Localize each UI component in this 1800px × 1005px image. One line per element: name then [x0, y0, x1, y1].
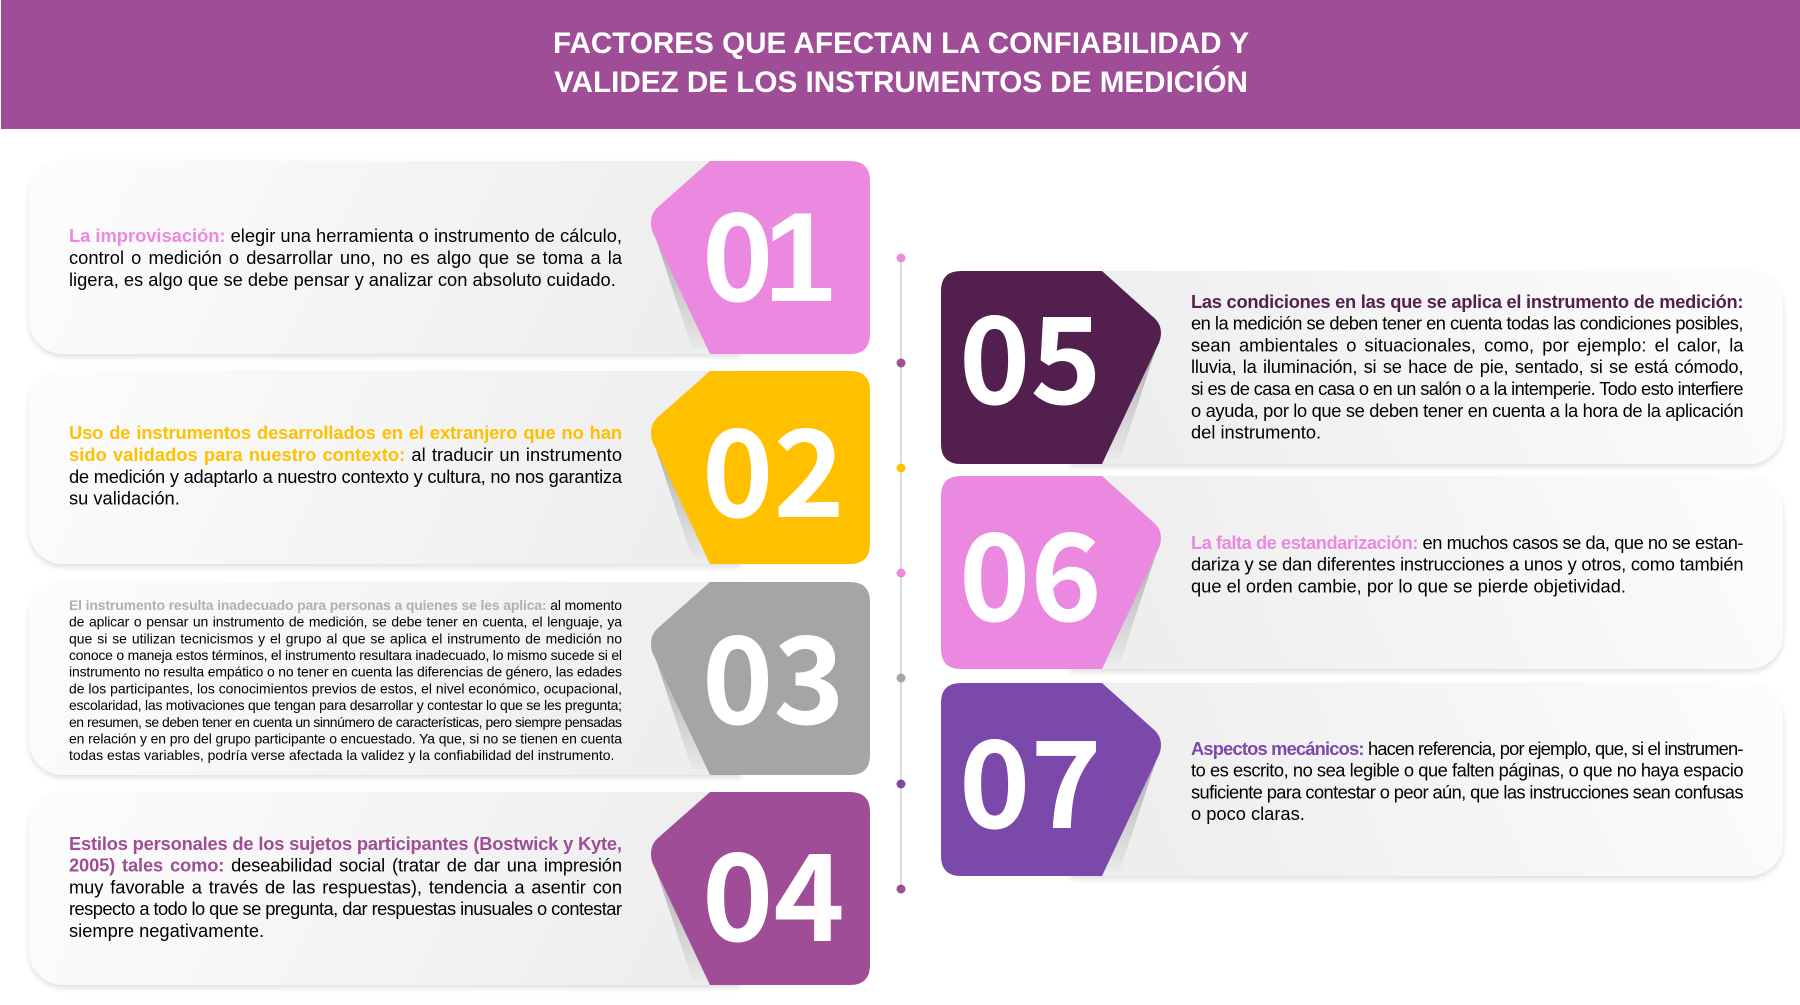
text: factor 05: lluvia, la iluminación, si se hace de pie, sentado, si se está cómodo,: [1190, 356, 1743, 377]
title: [553, 27, 1249, 99]
text: factor 03: de aplicar o pensar un instrumento de medición, se debe tener en cuenta, el lenguaje, ya: [69, 614, 622, 630]
panel: factor 05: [1070, 271, 1783, 464]
panel: factor 07: [1070, 683, 1783, 876]
title: FACTORES QUE AFECTAN LA CONFIABILIDAD Y: [553, 27, 1249, 60]
number badge 01: 1: [764, 186, 835, 328]
text: factor 06: que el orden cambie, por lo que se pierde objetividad.: [1190, 575, 1625, 596]
number badge 05: 05: [959, 264, 1102, 439]
text: factor 06: [1190, 532, 1743, 596]
text: factor 05: [1190, 291, 1744, 443]
text: factor 02: Uso de instrumentos desarrollados en el extranjero que no han: [69, 422, 622, 443]
text: factor 05: del instrumento.: [1190, 422, 1321, 443]
number badge 06: 06: [959, 481, 1102, 656]
number badge 07: 07: [959, 688, 1102, 863]
text: factor 03: instrumento no resulta empático o no tener en cuenta las diferencias de género, las edades: [69, 664, 622, 680]
panel: factor 03: [29, 582, 741, 775]
number badge 02: 02: [702, 377, 845, 552]
text: factor 04: 2005) tales como: deseabilidad social (tratar de dar una impresión: [69, 855, 622, 876]
number badge 04: 04: [702, 801, 845, 976]
text: factor 03: de los participantes, los conocimientos previos de estos, el nivel económico, ocupacional,: [69, 680, 622, 696]
text: factor 07: o poco claras.: [1190, 803, 1304, 824]
text: factor 01: ligera, es algo que se debe pensar y analizar con absoluto cuidado.: [69, 269, 616, 290]
panel: factor 01: [29, 161, 741, 354]
text: factor 02: su validación.: [69, 488, 180, 509]
text: factor 03: conoce o maneja estos términos, el instrumento resultara inadecuado, lo mismo sucede si el: [69, 647, 622, 663]
text: factor 01: [69, 225, 623, 290]
text: factor 03: todas estas variables, podría verse afectada la validez y la confiabilidad del instrumento.: [69, 747, 614, 763]
text: factor 01: La improvisación: elegir una herramienta o instrumento de cálculo,: [69, 225, 622, 246]
number badge 01: [651, 161, 870, 354]
text: factor 04: respecto a todo lo que se pregunta, dar respuestas inusuales o contestar: [69, 898, 622, 919]
text: factor 03: que si se utilizan tecnicismos y el grupo al que se aplica el instrumento de medición no: [69, 630, 622, 646]
number badge 03: 03: [702, 584, 845, 759]
title: VALIDEZ DE LOS INSTRUMENTOS DE MEDICIÓN: [554, 66, 1248, 99]
text: factor 07: [1190, 738, 1743, 824]
text: factor 04: muy favorable a través de las respuestas), tendencia a asentir con: [69, 876, 622, 897]
text: factor 06: dariza y se dan diferentes instrucciones a unos y otros, como también: [1190, 554, 1743, 575]
text: factor 05: si es de casa en casa o en un salón o a la intemperie. Todo esto interfiere: [1190, 378, 1743, 399]
number badge 02: [651, 371, 870, 564]
text: factor 06: La falta de estandarización: en muchos casos se da, que no se estan-: [1190, 532, 1743, 553]
text: factor 07: suficiente para contestar o peor aún, que las instrucciones sean confusas: [1190, 781, 1743, 802]
number badge 04: [651, 792, 870, 985]
number badge 03: [651, 582, 870, 775]
text: factor 05: en la medición se deben tener en cuenta todas las condiciones posibles,: [1190, 313, 1743, 334]
text: factor 03: en resumen, se deben tener en cuenta un sinnúmero de características, pero siempre pensadas: [69, 714, 622, 730]
text: factor 03: El instrumento resulta inadecuado para personas a quienes se les aplica: al momento: [69, 597, 622, 613]
header band: [1, 0, 1800, 129]
text: factor 01: control o medición o desarrollar uno, no es algo que se toma a la: [69, 247, 623, 268]
text: factor 05: Las condiciones en las que se aplica el instrumento de medición:: [1190, 291, 1743, 312]
text: factor 03: en relación y en pro del grupo participante o encuestado. Ya que, si no se tienen en cuenta: [69, 730, 622, 746]
text: factor 04: siempre negativamente.: [69, 920, 264, 941]
panel: factor 06: [1070, 476, 1783, 669]
panel: factor 04: [29, 792, 741, 985]
text: factor 03: escolaridad, las motivaciones que tengan para desarrollar y contestar lo que se les pregunta;: [69, 697, 622, 713]
number badge 01: 0: [702, 161, 773, 336]
text: factor 04: [69, 833, 622, 941]
number badge 05: [941, 264, 1161, 464]
text: factor 04: Estilos personales de los sujetos participantes (Bostwick y Kyte,: [69, 833, 622, 854]
number badge 07: [941, 683, 1161, 876]
text: factor 05: o ayuda, por lo que se deben tener en cuenta a la hora de la aplicación: [1190, 400, 1743, 421]
timeline: [896, 254, 906, 894]
text: factor 07: Aspectos mecánicos: hacen referencia, por ejemplo, que, si el instrumen-: [1190, 738, 1743, 759]
text: factor 02: [69, 422, 623, 509]
text: factor 02: sido validados para nuestro contexto: al traducir un instrumento: [69, 444, 622, 465]
text: factor 05: sean ambientales o situacionales, como, por ejemplo: el calor, la: [1190, 334, 1744, 355]
number badge 06: [941, 476, 1161, 669]
text: factor 03: [69, 597, 622, 763]
panel: factor 02: [29, 371, 741, 564]
text: factor 02: de medición y adaptarlo a nuestro contexto y cultura, no nos garantiza: [69, 466, 623, 487]
text: factor 07: to es escrito, no sea legible o que falten páginas, o que no haya espacio: [1190, 760, 1743, 781]
